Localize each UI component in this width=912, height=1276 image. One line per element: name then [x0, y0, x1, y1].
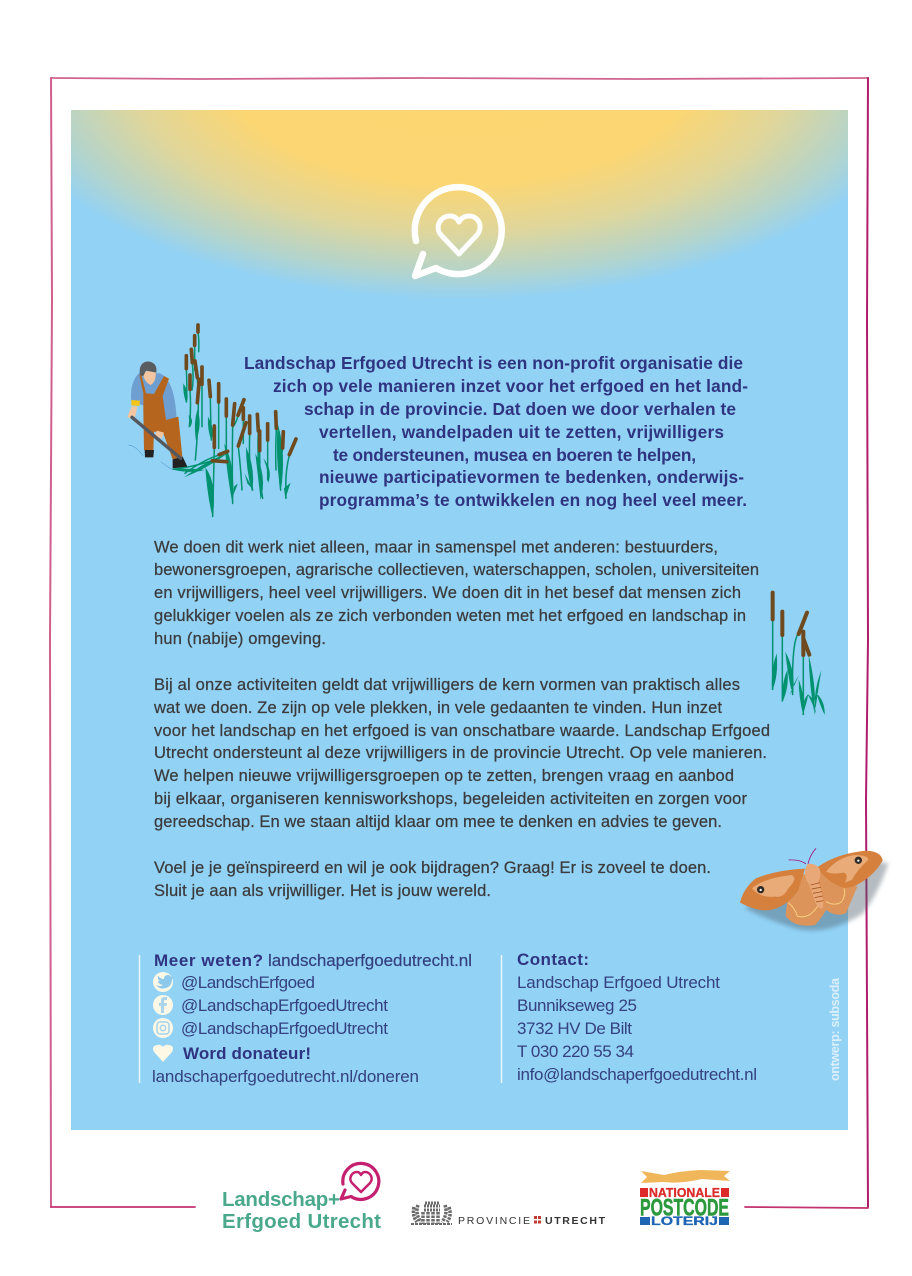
icon: instagram — [153, 1018, 173, 1038]
text block: samenspel: bewonersgroepen, agrarische collectieven, waterschappen, scholen, universiteiten — [154, 561, 759, 579]
logo: Landschap Erfgoed Utrecht — [222, 1163, 381, 1233]
text block: oproep: Voel je je geïnspireerd en wil je ook bijdragen? Graag! Er is zoveel te doen. — [154, 859, 711, 877]
icon: speech bubble with heart — [415, 187, 502, 276]
intro text: schap in de provincie. Dat doen we door verhalen te — [304, 399, 736, 419]
footer: meer weten — [152, 951, 472, 1086]
footer: meer weten: @LandschErfgoed — [181, 973, 315, 992]
illustration: small reeds — [772, 593, 825, 716]
logo: Provincie Utrecht — [411, 1203, 606, 1227]
illustration: moth — [740, 848, 888, 930]
text block: samenspel: en vrijwilligers, heel veel vrijwilligers. We doen dit in het besef dat mensen zich — [154, 584, 741, 602]
logo: Nationale Postcode Loterij — [640, 1170, 730, 1228]
logo: Nationale Postcode Loterij: LOTERIJ — [651, 1216, 718, 1228]
intro text: nieuwe participatievormen te bedenken, onderwijs- — [319, 467, 744, 487]
text block: samenspel: We doen dit werk niet alleen, maar in samenspel met anderen: bestuurders, — [154, 538, 718, 556]
footer: meer weten: @LandschapErfgoedUtrecht — [181, 996, 388, 1015]
footer: contact: Bunnikseweg 25 — [517, 996, 637, 1015]
text block: samenspel — [154, 538, 759, 648]
text block: vrijwilligers: voor het landschap en het erfgoed is van onschatbare waarde. Landschap Erfgoed — [154, 722, 770, 740]
logo: Landschap Erfgoed Utrecht: Erfgoed Utrecht — [222, 1210, 381, 1233]
logo: Nationale Postcode Loterij: NATIONALE — [649, 1186, 720, 1200]
text block: vrijwilligers: Utrecht ondersteunt al deze vrijwilligers in de provincie Utrecht. Op vele manieren. — [154, 744, 767, 762]
logo: Provincie Utrecht: PROVINCIE — [458, 1215, 530, 1227]
intro text — [244, 353, 748, 510]
footer: dividers — [140, 955, 502, 1083]
text block: vrijwilligers — [153, 676, 770, 831]
footer: meer weten: Word donateur! — [183, 1044, 311, 1063]
farmer — [127, 361, 187, 470]
icon: heart — [153, 1045, 173, 1062]
footer: contact: info@landschaperfgoedutrecht.nl — [517, 1065, 757, 1084]
footer: contact: Landschap Erfgoed Utrecht — [517, 973, 720, 992]
reeds — [172, 325, 296, 517]
footer: meer weten: landschaperfgoedutrecht.nl/doneren — [152, 1067, 419, 1086]
text block: oproep — [154, 859, 711, 900]
text block: vrijwilligers: Bij al onze activiteiten geldt dat vrijwilligers de kern vormen van praktisch alles — [154, 676, 740, 694]
footer: meer weten: @LandschapErfgoedUtrecht — [181, 1019, 388, 1038]
text block: vrijwilligers: wat we doen. Ze zijn op vele plekken, in vele gedaanten te vinden. Hun inzet — [153, 699, 722, 717]
footer: contact: 3732 HV De Bilt — [517, 1019, 632, 1038]
heading: meer weten: landschaperfgoedutrecht.nl — [268, 951, 472, 970]
logo: Nationale Postcode Loterij: POSTCODE — [640, 1194, 729, 1222]
heading: meer weten: Meer weten? — [154, 951, 263, 970]
icon: facebook — [153, 995, 173, 1015]
text block: samenspel: hun (nabije) omgeving. — [154, 630, 326, 648]
illustration: farmer and reeds — [127, 325, 296, 517]
footer: contact: Contact: — [517, 950, 589, 969]
text block: oproep: Sluit je aan als vrijwilliger. Het is jouw wereld. — [154, 882, 491, 900]
credit: ontwerp: ontwerp: subsoda — [828, 977, 842, 1081]
footer: contact: T 030 220 55 34 — [517, 1042, 634, 1061]
intro text: zich op vele manieren inzet voor het erfgoed en het land- — [273, 376, 748, 396]
logo: Landschap Erfgoed Utrecht: Landschap+ — [222, 1188, 340, 1211]
heading: meer weten — [154, 951, 472, 970]
text block: vrijwilligers: bij elkaar, organiseren kennisworkshops, begeleiden activiteiten en zorgen voor — [154, 790, 748, 808]
text block: samenspel: gelukkiger voelen als ze zich verbonden weten met het erfgoed en landschap in — [154, 607, 746, 625]
intro text: Landschap Erfgoed Utrecht is een non-profit organisatie die — [244, 353, 743, 373]
footer: contact — [517, 950, 757, 1084]
panel: sky background — [71, 110, 848, 1130]
text block: vrijwilligers: gereedschap. En we staan altijd klaar om mee te denken en advies te geven. — [154, 813, 722, 831]
pink hand-drawn frame — [50, 78, 868, 1208]
intro text: programma’s te ontwikkelen en nog heel veel meer. — [319, 490, 747, 510]
crest — [411, 1203, 452, 1224]
icon: twitter — [153, 972, 173, 992]
intro text: vertellen, wandelpaden uit te zetten, vrijwilligers — [319, 422, 724, 442]
logo: Provincie Utrecht: UTRECHT — [545, 1215, 606, 1227]
text block: vrijwilligers: We helpen nieuwe vrijwilligersgroepen op te zetten, brengen vraag en aanbod — [154, 767, 734, 785]
intro text: te ondersteunen, musea en boeren te helpen, — [333, 445, 696, 465]
